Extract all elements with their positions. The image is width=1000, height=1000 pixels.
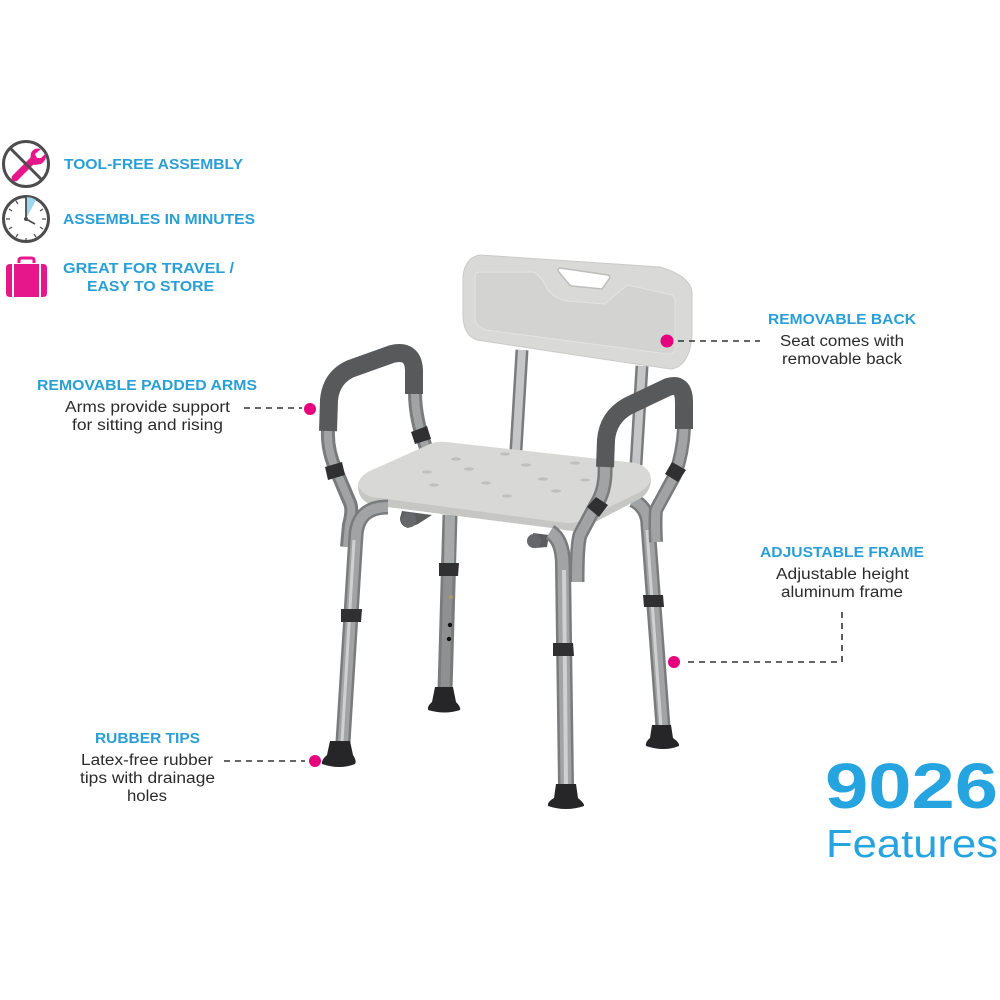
heading: great for travel: EASY TO STORE (87, 278, 214, 295)
heading: tool-free assembly: TOOL-FREE ASSEMBLY (64, 156, 243, 173)
back right leg (633, 500, 679, 749)
back support posts (516, 350, 642, 465)
title: 9026 features: 9026 (825, 750, 998, 822)
callout: removable back: removable back (782, 351, 902, 368)
callout: adjustable frame: ADJUSTABLE FRAME (760, 544, 924, 561)
callout: adjustable frame: aluminum frame (781, 584, 903, 601)
callout: rubber tips: RUBBER TIPS (95, 730, 200, 747)
callout: removable back: REMOVABLE BACK (768, 311, 916, 328)
callout: rubber tips: tips with drainage (80, 770, 215, 787)
right arm tubes (577, 428, 686, 582)
icon: no tools wrench (4, 142, 48, 186)
title: 9026 features (825, 750, 998, 866)
left arm pad (328, 353, 414, 431)
back left leg (428, 515, 460, 712)
callout: removable back: Seat comes with (780, 333, 904, 350)
callout: rubber tips: holes (127, 788, 167, 805)
seat (358, 442, 651, 531)
callout: adjustable frame: Adjustable height (776, 566, 910, 583)
heading: great for travel (63, 260, 235, 295)
callout: rubber tips (80, 730, 321, 805)
callout: rubber tips: Latex-free rubber (81, 752, 213, 769)
callout: adjustable frame (668, 544, 924, 668)
heading: assembles in minutes: ASSEMBLES IN MINUTES (63, 211, 255, 228)
callout: removable padded arms (37, 377, 316, 434)
front left leg (322, 507, 388, 767)
seat knobs (400, 511, 549, 548)
product photo: shower chair (322, 255, 692, 809)
front right leg (548, 532, 584, 809)
icon: clock (4, 196, 48, 242)
title: 9026 features: Features (826, 823, 998, 866)
right arm pad (605, 386, 684, 467)
callout: removable padded arms: for sitting and rising (72, 417, 223, 434)
left arm tubes (325, 392, 431, 547)
callout: removable padded arms: Arms provide support (65, 399, 231, 416)
icon: suitcase (6, 258, 47, 297)
backrest (463, 255, 692, 369)
callout: removable padded arms: REMOVABLE PADDED ARMS (37, 377, 257, 394)
callout: removable back (660, 311, 916, 368)
heading: great for travel: GREAT FOR TRAVEL / (63, 260, 235, 277)
